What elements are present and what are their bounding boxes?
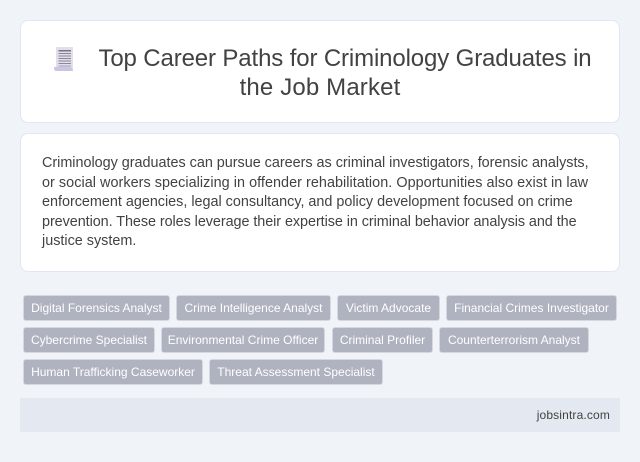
tag: Environmental Crime Officer: Environmental Crime Officer [168, 333, 318, 347]
tag: Human Trafficking Caseworker: Human Trafficking Caseworker [31, 365, 195, 379]
tag: Crime Intelligence Analyst [176, 295, 331, 321]
icon: document scroll [54, 47, 73, 71]
tag: Crime Intelligence Analyst: Crime Intelligence Analyst [184, 301, 323, 315]
tag: Environmental Crime Officer [161, 327, 325, 353]
tag: Criminal Profiler: Criminal Profiler [340, 333, 425, 347]
tag: Counterterrorism Analyst: Counterterrorism Analyst [448, 333, 580, 347]
tag: Counterterrorism Analyst [439, 327, 589, 353]
tag: Digital Forensics Analyst: Digital Forensics Analyst [31, 301, 162, 315]
footer source text: jobsintra.com [537, 408, 610, 422]
title line 2: the Job Market [240, 74, 400, 101]
tag: Victim Advocate: Victim Advocate [346, 301, 431, 315]
tag: Threat Assessment Specialist [209, 359, 383, 385]
title line 1: Top Career Paths for Criminology Graduates in [98, 45, 592, 72]
panel: header card [20, 20, 620, 123]
tag: Financial Crimes Investigator [446, 295, 617, 321]
description line 3: enforcement agencies, legal consultancy, and policy development focused on crime [42, 194, 573, 210]
tag: Digital Forensics Analyst [23, 295, 170, 321]
description line 5: justice system. [42, 233, 136, 249]
tag: Financial Crimes Investigator: Financial Crimes Investigator [454, 301, 609, 315]
tag: Human Trafficking Caseworker [23, 359, 203, 385]
tag: Threat Assessment Specialist: Threat Assessment Specialist [217, 365, 375, 379]
description line 1: Criminology graduates can pursue careers as criminal investigators, forensic analysts, [42, 155, 589, 171]
tag: Cybercrime Specialist: Cybercrime Specialist [31, 333, 147, 347]
tag: Victim Advocate [337, 295, 440, 321]
description line 2: or social workers specializing in offender rehabilitation. Opportunities also exist in law [42, 175, 588, 191]
description line 4: prevention. These roles leverage their expertise in criminal behavior analysis and the [42, 214, 577, 230]
tag: Criminal Profiler [332, 327, 433, 353]
footer bar [20, 398, 620, 432]
panel: description card [20, 133, 620, 272]
tag: Cybercrime Specialist [23, 327, 155, 353]
